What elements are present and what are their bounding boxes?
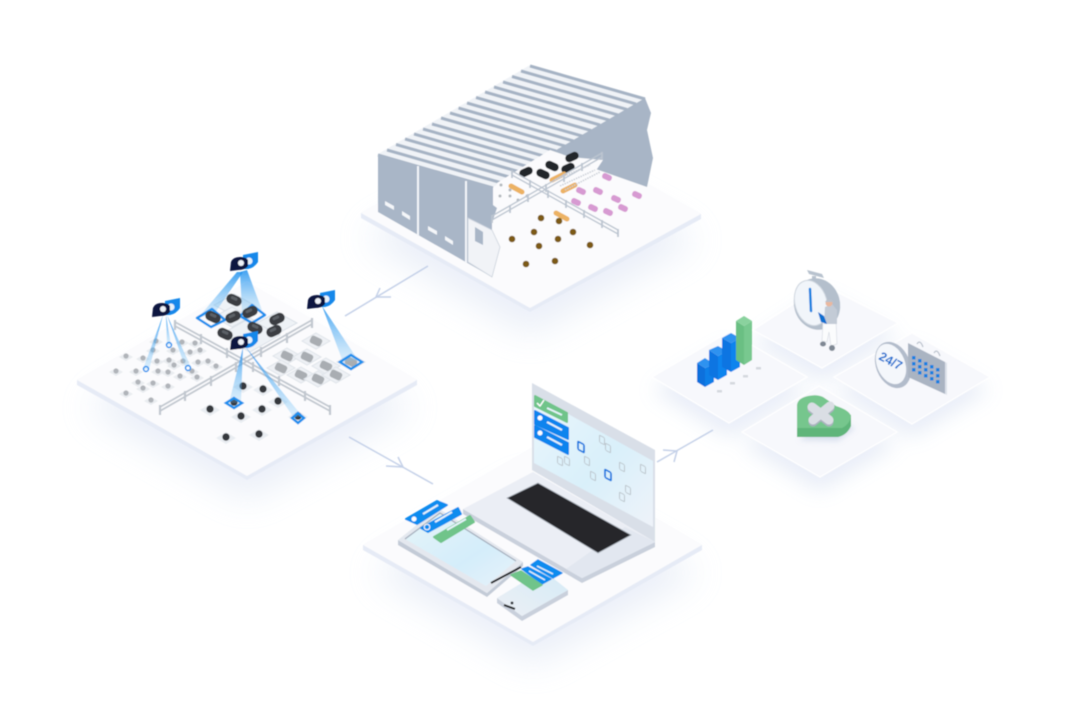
laptop base: [463, 472, 655, 583]
screen status cards: [535, 396, 568, 454]
arrow: laptop to outcomes: [657, 430, 713, 462]
camera beams: [143, 270, 358, 418]
icon: stopwatch: [788, 270, 846, 335]
axis labels: [717, 367, 761, 392]
icon: farm worker: [818, 299, 837, 351]
barn interior floor: [493, 150, 603, 223]
barn fences: [492, 152, 618, 237]
barn door: [468, 218, 500, 277]
bar chart: [697, 316, 761, 392]
pink pigs: [570, 172, 643, 217]
icon: 24/7 dial: [868, 336, 918, 394]
grey poultry: [109, 338, 223, 405]
bar 4: [736, 316, 752, 365]
barn back wall: [550, 98, 653, 187]
tablet cards: [406, 501, 474, 542]
illustration: camera monitoring: [109, 252, 365, 444]
barn windows: [385, 201, 453, 245]
bar 2: [709, 346, 727, 380]
illustration: laptop: [398, 383, 655, 621]
feeders: [511, 174, 575, 219]
phone cards: [511, 560, 562, 590]
selection frames: [144, 305, 362, 423]
barn roof panels: [378, 65, 645, 188]
bar 1: [697, 358, 714, 387]
tablet: [398, 508, 523, 597]
fences: [160, 318, 330, 415]
cow pens: [214, 294, 297, 352]
panel: outcome tile left: [652, 332, 807, 423]
bar 3: [722, 333, 740, 372]
grey pigs in pens: [267, 333, 365, 387]
laptop screen: [532, 383, 655, 542]
arrow: monitoring to laptop: [349, 437, 433, 484]
camera icons: [152, 252, 335, 350]
illustration: barn: [378, 65, 653, 277]
icon: 24/7 dial: 24/7: [877, 349, 905, 373]
icon: calendar: [908, 342, 947, 395]
icon: health heart: [797, 395, 855, 441]
small grey animals: [498, 184, 528, 202]
laptop keyboard: [507, 483, 631, 553]
cows in barn: [518, 150, 580, 181]
cows: [204, 292, 286, 342]
dark animals: [200, 381, 308, 444]
panel: laptop platform: [363, 447, 702, 665]
panel: monitoring platform: [77, 282, 417, 500]
diagram artwork: [77, 65, 990, 665]
arrow: barn to monitoring: [345, 266, 428, 316]
panel: outcome tile top: [753, 285, 898, 368]
screen detection markers: [558, 435, 646, 502]
calendar date grid: [912, 356, 940, 384]
health cross: [812, 406, 830, 422]
panel: outcome tile right: [834, 333, 990, 424]
brown poultry: [509, 215, 593, 267]
panel: barn platform: [361, 118, 701, 335]
panel: outcome tile bottom: [742, 386, 897, 477]
barn left wall: [378, 154, 497, 277]
phone: [497, 570, 568, 621]
